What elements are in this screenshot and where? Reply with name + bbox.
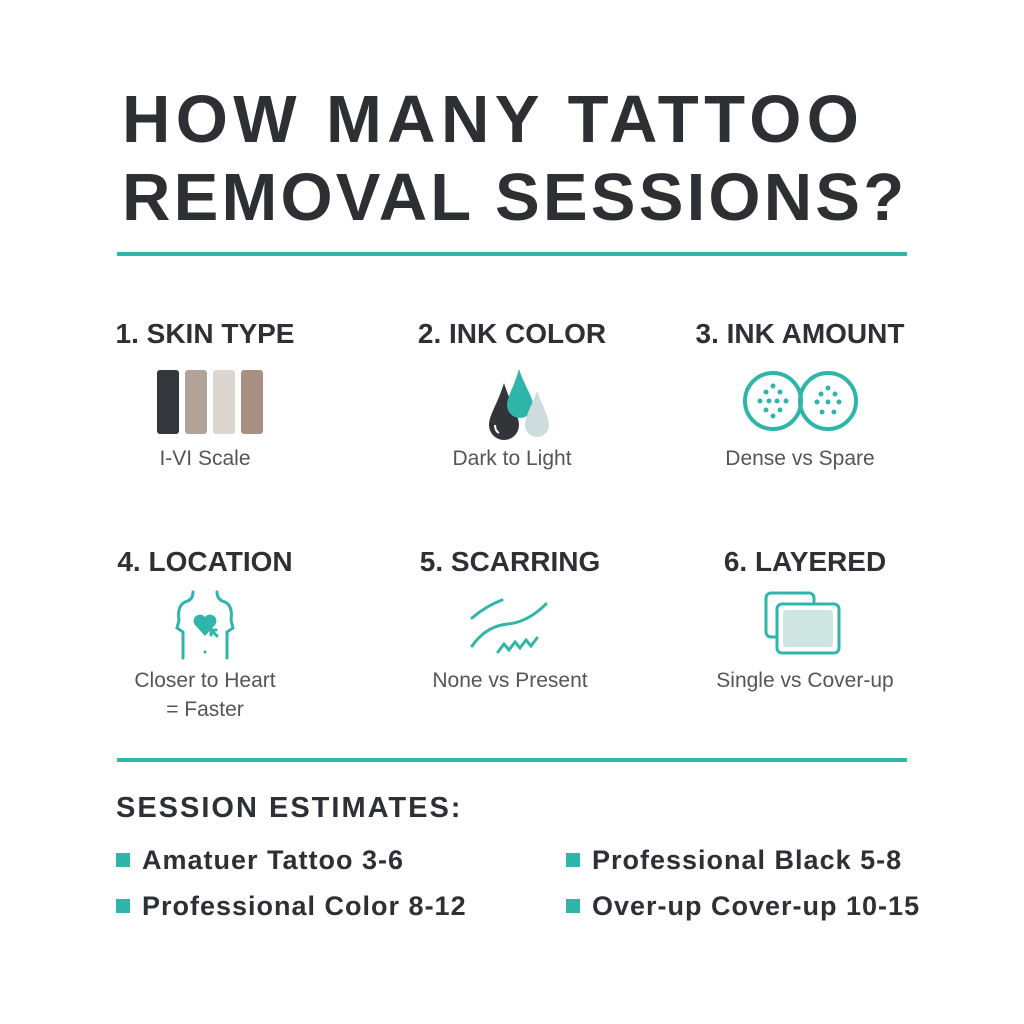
icon: stacked squares bbox=[764, 592, 840, 654]
factor: scarring bbox=[420, 546, 600, 692]
estimates list bbox=[116, 845, 920, 921]
factor: ink color bbox=[418, 318, 606, 470]
estimates list: Amatuer Tattoo 3-6 bbox=[142, 845, 404, 875]
factor: layered: 6. LAYERED bbox=[724, 546, 886, 577]
label: Dark to Light bbox=[452, 447, 572, 470]
label bbox=[134, 669, 276, 721]
title: REMOVAL SESSIONS? bbox=[122, 160, 907, 235]
icon: scar lines bbox=[470, 598, 548, 654]
estimates list: Professional Black 5-8 bbox=[592, 845, 902, 875]
label: = Faster bbox=[166, 698, 244, 721]
title bbox=[122, 82, 907, 235]
factor: location: 4. LOCATION bbox=[117, 546, 293, 577]
label: I-VI Scale bbox=[159, 447, 251, 470]
factor: ink amount bbox=[696, 318, 904, 470]
title: HOW MANY TATTOO bbox=[122, 82, 864, 157]
label: None vs Present bbox=[432, 669, 588, 692]
factor: ink amount: 3. INK AMOUNT bbox=[696, 318, 904, 349]
factor: scarring: 5. SCARRING bbox=[420, 546, 600, 577]
estimates list: Over-up Cover-up 10-15 bbox=[592, 891, 920, 921]
icon: dot circles bbox=[743, 371, 858, 431]
label: Dense vs Spare bbox=[725, 447, 875, 470]
heading: session estimates: SESSION ESTIMATES: bbox=[116, 792, 462, 824]
factor: layered bbox=[716, 546, 894, 692]
factor: ink color: 2. INK COLOR bbox=[418, 318, 606, 349]
factor: skin type bbox=[116, 318, 294, 470]
label: Single vs Cover-up bbox=[716, 669, 894, 692]
estimates list: Professional Color 8-12 bbox=[142, 891, 467, 921]
heading: 1. SKIN TYPE bbox=[116, 318, 294, 349]
factor: location bbox=[117, 546, 293, 721]
icon: skin swatches bbox=[157, 370, 263, 434]
icon: torso with heart bbox=[175, 590, 235, 660]
icon: drops bbox=[489, 369, 549, 440]
label: Closer to Heart bbox=[134, 669, 276, 692]
